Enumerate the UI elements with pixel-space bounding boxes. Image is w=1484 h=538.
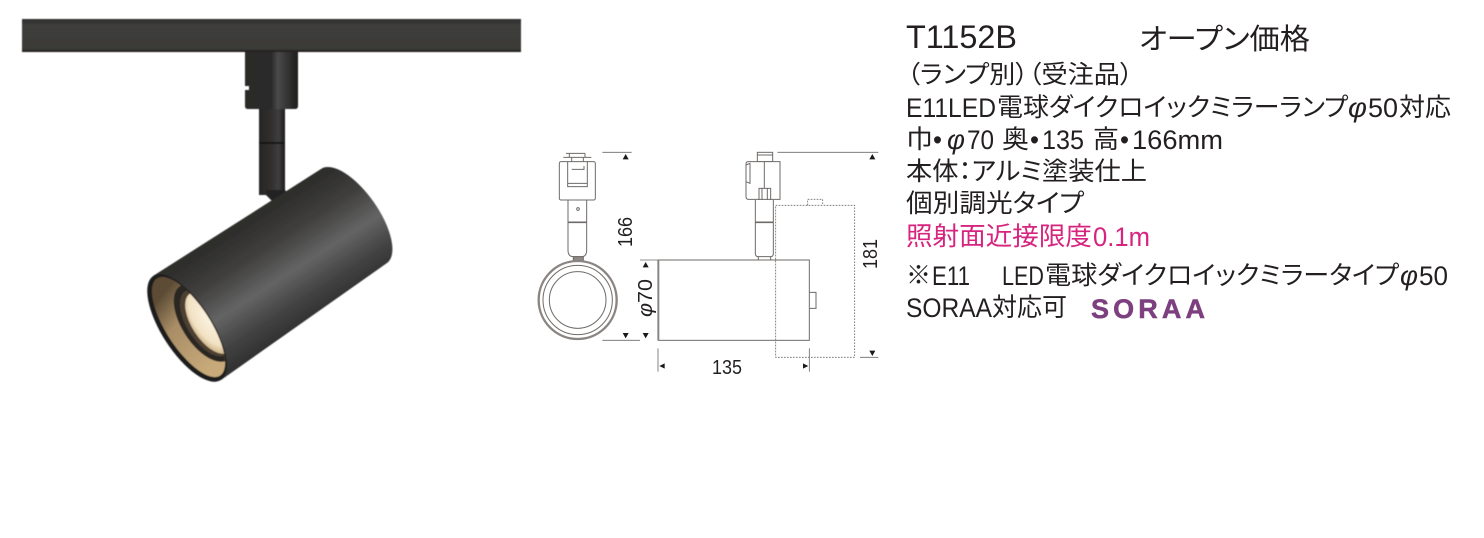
SORAA compatibility: SORAA xyxy=(906,293,992,323)
proximity limit: 0.1m xyxy=(1093,222,1150,252)
track rail xyxy=(22,19,521,52)
lamp sold separately, made to order: （ランプ別）（受注品） xyxy=(907,61,1133,89)
track adapter xyxy=(245,52,298,109)
dimension label 166: 166 xyxy=(615,217,637,247)
proximity limit xyxy=(906,222,1150,252)
dimensions: 高 xyxy=(1093,126,1119,154)
dimension drawing xyxy=(539,152,882,379)
dimensions: 70 xyxy=(967,125,994,155)
lamp note: φ xyxy=(1400,261,1418,291)
dimensions: 166mm xyxy=(1132,125,1223,155)
dimming type: 個別調光タイプ xyxy=(906,190,1085,218)
dimensions: • xyxy=(1030,125,1039,155)
SORAA compatibility: 対応可 xyxy=(992,294,1067,322)
dimension label 135: 135 xyxy=(712,357,742,379)
dimension lines and arrows xyxy=(602,152,878,372)
lamp compatibility xyxy=(906,93,1451,123)
dimensions xyxy=(906,125,1223,155)
dimensions: 奥 xyxy=(1002,126,1029,154)
lamp note: 電球ダイクロイックミラータイプ xyxy=(1045,262,1400,290)
cylinder body xyxy=(153,167,392,380)
lamp note: E11 xyxy=(932,261,970,291)
lamp note: ※ xyxy=(906,262,931,290)
body material: 本体：アルミ塗装仕上 xyxy=(906,158,1147,186)
stem xyxy=(259,109,290,205)
lamp note: 50 xyxy=(1419,261,1448,291)
dimensions: 巾 xyxy=(906,126,933,154)
lamp compatibility: φ xyxy=(1348,93,1367,123)
lamp compatibility: 電球ダイクロイックミラーランプ xyxy=(997,94,1349,122)
dimension label 181: 181 xyxy=(860,239,882,269)
lamp compatibility: 対応 xyxy=(1399,94,1451,122)
model number: T1152B xyxy=(906,19,1017,55)
dimensions: • xyxy=(1120,125,1129,155)
front opening xyxy=(146,274,227,383)
lamp compatibility: 50 xyxy=(1368,93,1398,123)
lamp note xyxy=(906,261,1448,291)
dimensions: • xyxy=(933,125,942,155)
dimension label phi 70: φ70 xyxy=(635,279,657,317)
lamp compatibility: E11LED xyxy=(906,93,996,123)
price: オープン価格 xyxy=(1139,23,1310,56)
SORAA compatibility xyxy=(906,293,1067,323)
dimensions: 135 xyxy=(1042,125,1084,155)
proximity limit: 照射面近接限度 xyxy=(906,223,1092,251)
side view xyxy=(658,152,855,357)
product specification text xyxy=(906,19,1451,324)
dimensions: φ xyxy=(947,125,965,155)
SORAA logo: SORAA xyxy=(1091,294,1205,324)
front view xyxy=(539,153,617,339)
product photo: track spotlight xyxy=(22,19,521,394)
lamp note: LED xyxy=(1002,261,1044,291)
